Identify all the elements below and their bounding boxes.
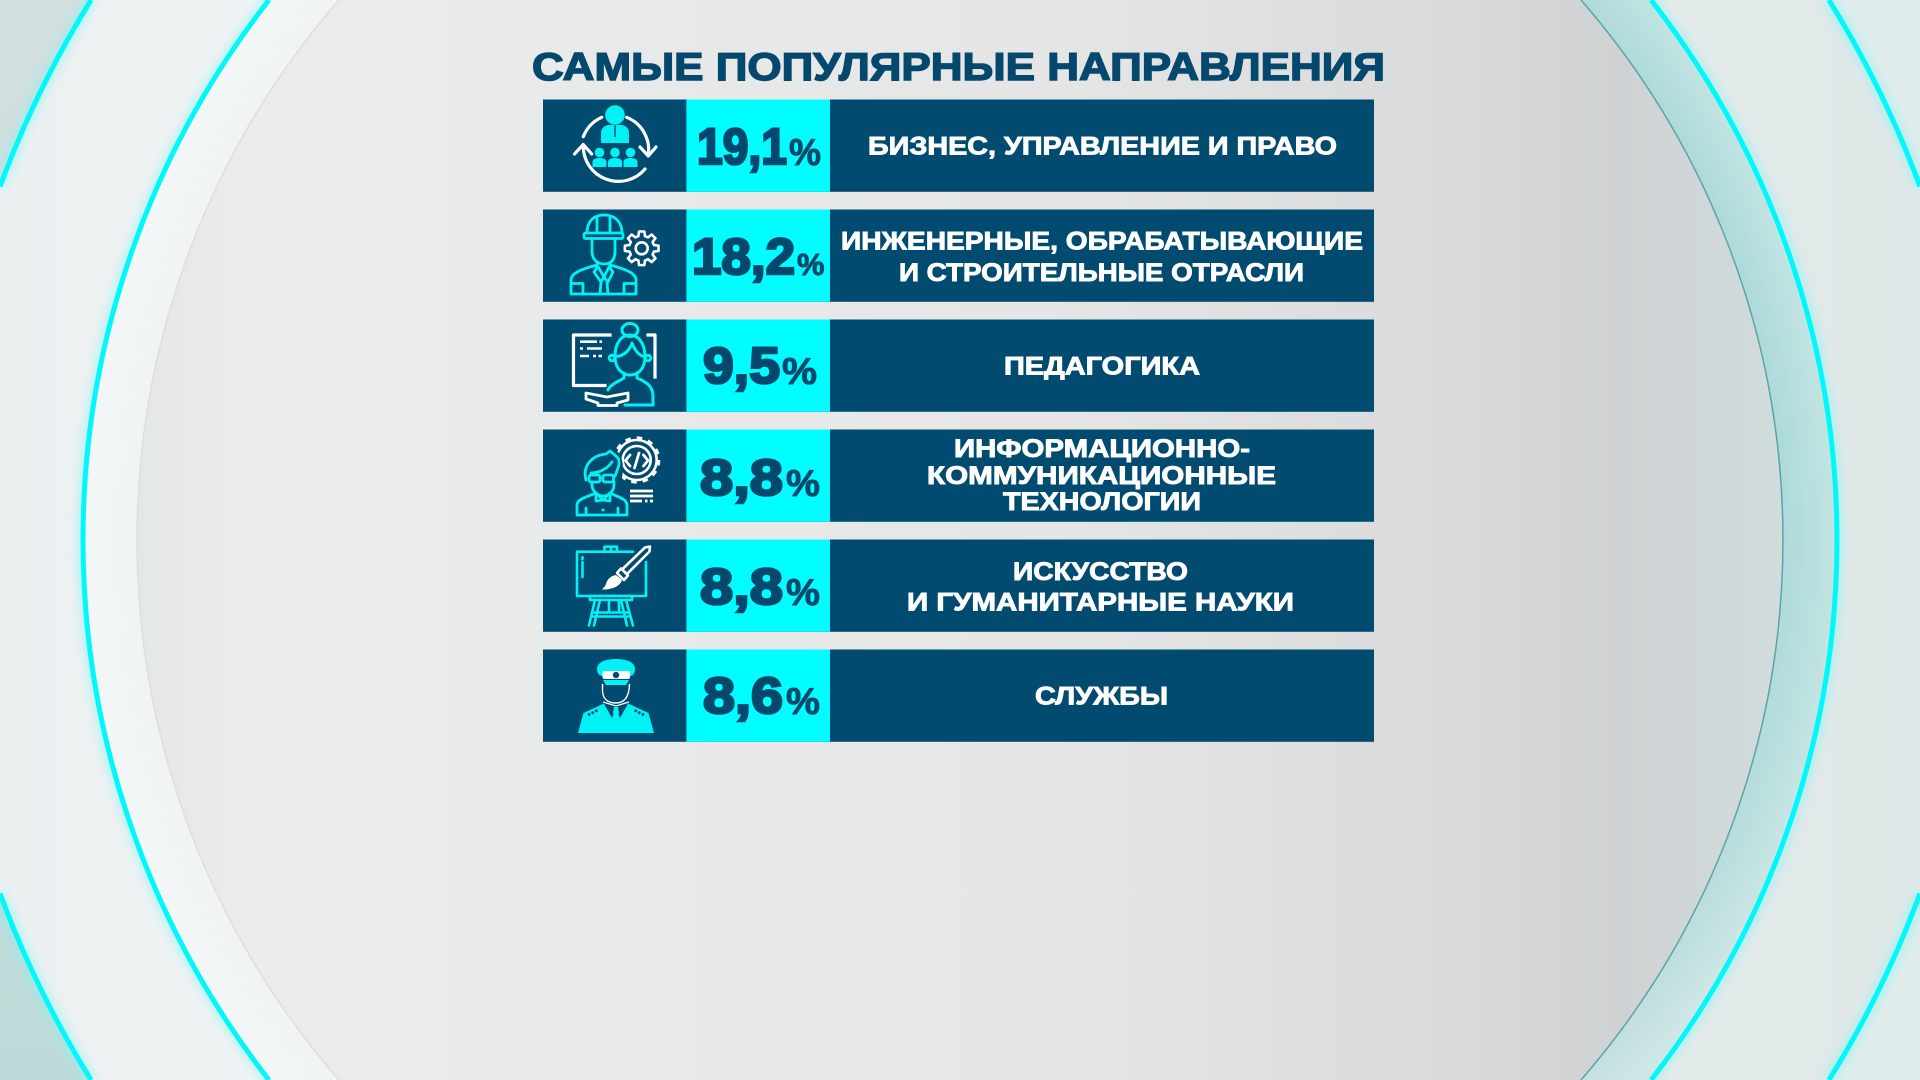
percent: 8,8 bbox=[700, 449, 820, 506]
label: ICT: ИНФОРМАЦИОННО- bbox=[954, 435, 1250, 463]
row 2: engineering bbox=[543, 210, 1374, 302]
label: engineering: ИНЖЕНЕРНЫЕ, ОБРАБАТЫВАЮЩИЕ bbox=[841, 228, 1363, 256]
row 3: pedagogy bbox=[543, 320, 1374, 412]
percent: 19,1: % bbox=[789, 132, 821, 173]
percent: 8,8: 8,8 bbox=[700, 558, 783, 615]
icon: engineer with gear bbox=[571, 215, 659, 294]
percent: 8,8: % bbox=[786, 463, 820, 504]
percent: 9,5: % bbox=[782, 351, 817, 392]
percent: 8,6 bbox=[703, 667, 820, 724]
label: arts: ИСКУССТВО bbox=[1013, 558, 1188, 586]
percent: 8,6: 8,6 bbox=[703, 667, 783, 724]
percent: 9,5: 9,5 bbox=[703, 337, 780, 394]
percent: 8,8: % bbox=[786, 572, 820, 613]
row 4: ICT bbox=[543, 430, 1374, 522]
label: arts: И ГУМАНИТАРНЫЕ НАУКИ bbox=[907, 588, 1294, 616]
row 5: arts bbox=[543, 540, 1374, 632]
percent: 9,5 bbox=[703, 337, 817, 394]
label: business: БИЗНЕС, УПРАВЛЕНИЕ И ПРАВО bbox=[868, 132, 1337, 160]
percent: 19,1: 19,1 bbox=[697, 118, 787, 175]
label: pedagogy: ПЕДАГОГИКА bbox=[1004, 352, 1200, 380]
label: engineering bbox=[841, 228, 1363, 287]
icon: officer bbox=[578, 659, 654, 733]
title: САМЫЕ ПОПУЛЯРНЫЕ НАПРАВЛЕНИЯ bbox=[532, 46, 1385, 89]
icon: easel and brush bbox=[577, 545, 651, 626]
icon: teacher at board bbox=[574, 324, 655, 406]
percent: 18,2: 18,2 bbox=[692, 228, 795, 285]
label: ICT bbox=[927, 435, 1276, 516]
row 6: services bbox=[543, 650, 1374, 742]
label: engineering: И СТРОИТЕЛЬНЫЕ ОТРАСЛИ bbox=[899, 259, 1304, 287]
percent: 8,6: % bbox=[786, 681, 820, 722]
percent: 8,8 bbox=[700, 558, 820, 615]
icon: developer with code gear bbox=[577, 438, 659, 515]
percent: 8,8: 8,8 bbox=[700, 449, 783, 506]
row 1: business bbox=[543, 100, 1374, 192]
label: services: СЛУЖБЫ bbox=[1035, 682, 1168, 710]
label: ICT: ТЕХНОЛОГИИ bbox=[1003, 488, 1201, 516]
icon: manager and team cycle bbox=[574, 105, 656, 181]
label: ICT: КОММУНИКАЦИОННЫЕ bbox=[927, 462, 1276, 490]
label: arts bbox=[907, 558, 1294, 616]
percent: 18,2: % bbox=[797, 247, 824, 282]
